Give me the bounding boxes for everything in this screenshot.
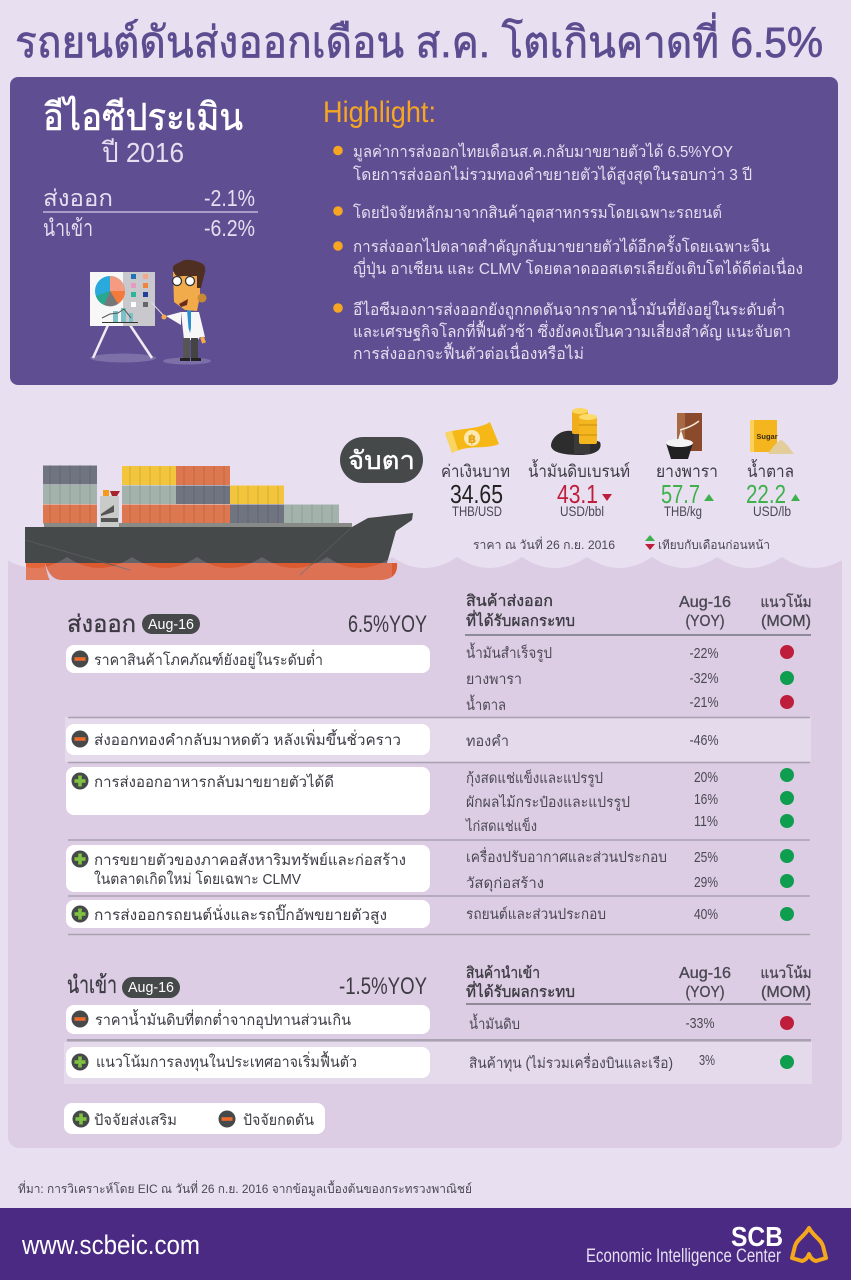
website: www.scbeic.com [21, 1230, 200, 1260]
section: imports [64, 964, 812, 1084]
table header: (MOM) [761, 613, 811, 630]
table rows: exports: ไก่สดแช่แข็ง [465, 816, 537, 835]
factor: gold exports: ส่งออกทองคำกลับมาหดตัว หลังเพิ่มขึ้นชั่วคราว [94, 729, 401, 749]
icon: baht note: ฿ [468, 432, 476, 446]
table rows: exports: รถยนต์และส่วนประกอบ [466, 906, 606, 923]
brand wordmark [586, 1221, 783, 1267]
icon: sugar bag [750, 420, 794, 454]
table rows: exports: 16% [694, 791, 718, 808]
note: price date: ราคา ณ วันที่ 26 ก.ย. 2016 [473, 536, 615, 552]
table rows: exports: -21% [690, 694, 718, 711]
commodity: baht: 34.65 [450, 479, 503, 509]
icon: presenter with chart board [90, 260, 211, 364]
badge: watch: จับตา [348, 447, 415, 475]
commodity: sugar: น้ำตาล [747, 459, 794, 481]
title: รถยนต์ดันส่งออกเดือน ส.ค. โตเกินคาดที่ 6.5% [15, 13, 823, 67]
commodity: baht [441, 462, 510, 519]
heading: exports: ส่งออก [67, 611, 136, 638]
table rows: exports: -46% [690, 732, 718, 749]
table rows: imports: 3% [699, 1052, 715, 1069]
table header: สินค้านำเข้า [466, 965, 540, 982]
commodity: brent crude: น้ำมันดิบเบรนท์ [528, 459, 630, 481]
commodity: brent crude: USD/bbl [560, 504, 604, 519]
heading: EIC forecast: อีไอซีประเมิน [43, 96, 243, 139]
forecast: imports: -6.2% [204, 215, 255, 241]
legend: factors: ปัจจัยกดดัน [243, 1112, 314, 1129]
commodity: rubber: THB/kg [664, 504, 702, 519]
badge: Aug-16 [122, 977, 180, 998]
factor: food exports: การส่งออกอาหารกลับมาขยายตัวได้ดี [94, 773, 334, 791]
table rows: exports: -22% [690, 645, 718, 662]
icon: crude oil barrels [551, 408, 601, 455]
table rows: exports: น้ำตาล [466, 694, 506, 714]
table header: (YOY) [686, 984, 724, 1001]
icon: rubber tree and cup [666, 413, 702, 459]
factor: real estate and construction [66, 845, 430, 892]
factor: gold exports [66, 724, 430, 755]
subheading: year 2016: ปี 2016 [101, 137, 184, 168]
badge: watch [340, 437, 423, 483]
table header: สินค้าส่งออก [466, 593, 553, 610]
table rows: exports [465, 642, 794, 923]
commodity: brent crude [528, 459, 630, 519]
commodity: rubber: 57.7 [661, 479, 700, 509]
icon: sugar bag: Sugar [756, 432, 778, 441]
table header: แนวโน้ม [760, 593, 812, 611]
table rows: exports: 40% [694, 906, 718, 923]
factor: cars and pickups: การส่งออกรถยนต์นั่งและรถปิ๊กอัพขยายตัวสูง [94, 904, 387, 924]
brand wordmark: SCB [731, 1221, 783, 1252]
table rows: exports: ผักผลไม้กระป๋องและแปรรูป [466, 793, 630, 811]
legend: month comparison: เทียบกับเดือนก่อนหน้า [658, 538, 770, 552]
water overlay [26, 557, 392, 580]
table header [466, 964, 812, 1005]
factor: real estate and construction: การขยายตัวของภาคอสังหาริมทรัพย์และก่อสร้าง [94, 852, 406, 869]
commodity: sugar: 22.2 [746, 479, 786, 509]
table header: Aug-16 [679, 594, 731, 611]
table rows: exports: 11% [694, 813, 718, 830]
table header: แนวโน้ม [760, 964, 812, 982]
commodity: rubber: ยางพารา [656, 462, 718, 481]
table rows: imports: น้ำมันดิบ [469, 1013, 520, 1033]
factor: commodity prices: ราคาสินค้าโภคภัณฑ์ยังอยู่ในระดับต่ำ [94, 649, 323, 669]
table header: (MOM) [761, 984, 811, 1001]
bullet 4: และเศรษฐกิจโลกที่ฟื้นตัวช้า ซึ่งยังคงเป็นความเสี่ยงสำคัญ แนะจับตา [353, 320, 791, 341]
source note: ที่มา: การวิเคราะห์โดย EIC ณ วันที่ 26 ก.ย. 2016 จากข้อมูลเบื้องต้นของกระทรวงพาณิชย์ [18, 1180, 472, 1197]
footer band [0, 1208, 851, 1280]
factor: domestic investment [66, 1047, 430, 1078]
bullet 3 [333, 235, 803, 279]
factor: crude oil prices [66, 1005, 430, 1034]
badge: Aug-16: Aug-16 [148, 616, 194, 633]
legend: factors: ปัจจัยส่งเสริม [94, 1112, 177, 1129]
table header: ที่ได้รับผลกระทบ [466, 981, 575, 1001]
bullet 1 [333, 142, 752, 185]
table rows: exports: เครื่องปรับอากาศและส่วนประกอบ [466, 847, 667, 866]
badge: Aug-16: Aug-16 [128, 979, 174, 996]
icon: SCB logo [792, 1228, 826, 1261]
table rows: exports: น้ำมันสำเร็จรูป [466, 642, 552, 662]
illustration: container ship [25, 465, 413, 580]
commodity: rubber [656, 462, 718, 519]
heading: imports: นำเข้า [67, 972, 117, 999]
table rows: exports: -32% [690, 670, 718, 687]
forecast: exports: ส่งออก [43, 185, 113, 211]
imports growth: -1.5%YOY [339, 973, 427, 1000]
factor: real estate and construction: ในตลาดเกิดใหม่ โดยเฉพาะ CLMV [94, 870, 301, 888]
heading: Highlight: Highlight: [323, 96, 436, 129]
factor: cars and pickups [66, 900, 430, 928]
table rows: exports: กุ้งสดแช่แข็งและแปรรูป [466, 768, 603, 787]
commodity: baht: ค่าเงินบาท [441, 462, 510, 481]
panel: water background [2, 557, 847, 1150]
factor: domestic investment: แนวโน้มการลงทุนในประเทศอาจเริ่มฟื้นตัว [96, 1051, 357, 1072]
forecast: imports [43, 215, 255, 241]
factor: crude oil prices: ราคาน้ำมันดิบที่ตกต่ำจากอุปทานส่วนเกิน [95, 1009, 351, 1030]
table header: ที่ได้รับผลกระทบ [466, 610, 575, 630]
bullet 4 [333, 298, 791, 363]
commodity: sugar [746, 459, 800, 519]
table rows: imports [469, 1013, 794, 1072]
factor: commodity prices [66, 645, 430, 673]
bullet 3: ญี่ปุ่น อาเซียน และ CLMV โดยตลาดออสเตรเลียยังเติบโตได้ดีต่อเนื่อง [353, 257, 803, 279]
table rows: exports: 20% [694, 769, 718, 786]
table rows: exports: ทองคำ [466, 734, 509, 750]
section: exports [65, 593, 812, 934]
bullet 4: การส่งออกจะฟื้นตัวต่อเนื่องหรือไม่ [353, 342, 584, 363]
table rows: exports: ยางพารา [466, 672, 522, 688]
commodity: sugar: USD/lb [753, 504, 791, 519]
icon: baht note [445, 422, 499, 453]
panel: EIC forecast and highlights [10, 77, 838, 385]
bullet 3: การส่งออกไปตลาดสำคัญกลับมาขยายตัวได้อีกครั้งโดยเฉพาะจีน [353, 235, 770, 256]
exports growth: 6.5%YOY [348, 611, 427, 638]
table rows: imports: สินค้าทุน (ไม่รวมเครื่องบินและเรือ) [469, 1053, 673, 1072]
brand wordmark: Economic Intelligence Center [586, 1246, 782, 1267]
factor: food exports [66, 767, 430, 815]
bullet 1: โดยการส่งออกไม่รวมทองคำขยายตัวได้สูงสุดในรอบกว่า 3 ปี [353, 165, 752, 185]
table header [465, 593, 812, 636]
table header: (YOY) [686, 613, 724, 630]
commodity: brent crude: 43.1 [557, 479, 598, 509]
forecast: exports: -2.1% [204, 185, 255, 211]
forecast: exports [43, 185, 255, 211]
legend: factors [64, 1103, 325, 1134]
bullet 4: อีไอซีมองการส่งออกยังถูกกดดันจากราคาน้ำมันที่ยังอยู่ในระดับต่ำ [353, 298, 785, 320]
commodity: baht: THB/USD [452, 504, 502, 519]
forecast: imports: นำเข้า [43, 215, 93, 241]
bullet 2: โดยปัจจัยหลักมาจากสินค้าอุตสาหกรรมโดยเฉพาะรถยนต์ [353, 203, 722, 223]
table rows: exports: 29% [694, 874, 718, 891]
table rows: exports: วัสดุก่อสร้าง [466, 875, 544, 892]
table rows: exports: 25% [694, 849, 718, 866]
bullet 1: มูลค่าการส่งออกไทยเดือนส.ค.กลับมาขยายตัวได้ 6.5%YOY [353, 142, 733, 162]
table header: Aug-16 [679, 965, 731, 982]
table rows: imports: -33% [686, 1015, 714, 1032]
